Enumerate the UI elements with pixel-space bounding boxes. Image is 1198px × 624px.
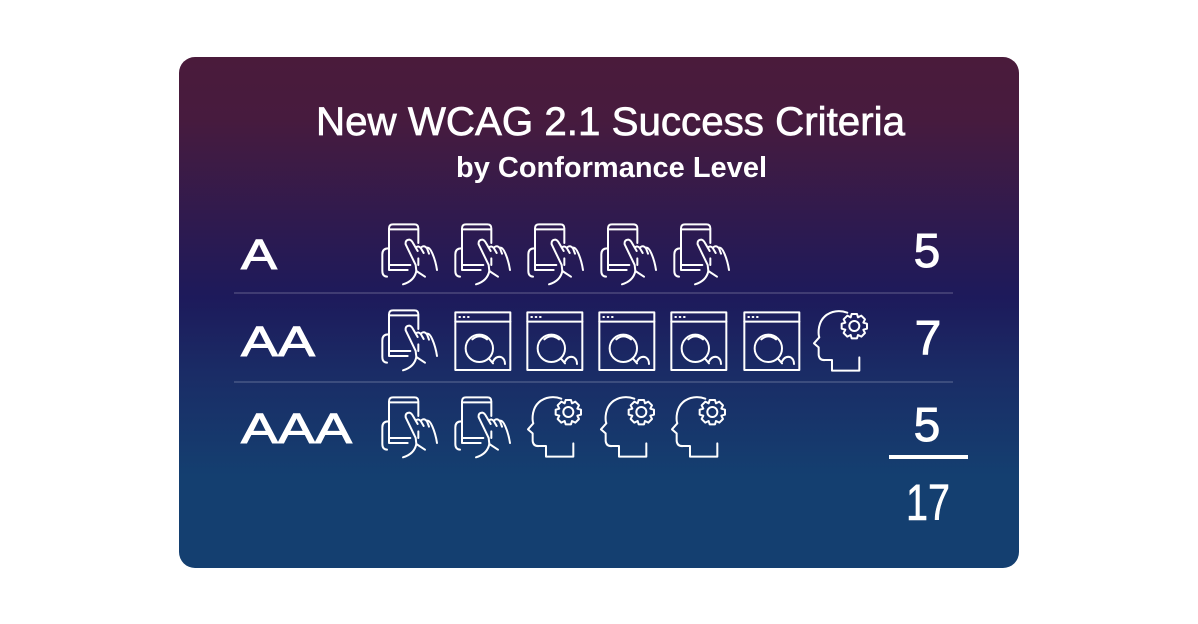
count: AAA: 5 bbox=[914, 399, 940, 452]
icons: A row bbox=[382, 224, 729, 284]
icons: AAA row bbox=[382, 397, 725, 457]
panel: card background bbox=[179, 57, 1019, 568]
count: AA: 7 bbox=[915, 312, 941, 365]
label: AA: AA bbox=[241, 318, 315, 366]
row: level AAA bbox=[241, 397, 725, 457]
title: New WCAG 2.1 Success Criteria bbox=[316, 100, 906, 144]
label: AAA: AAA bbox=[241, 405, 352, 453]
sum rule bbox=[889, 455, 968, 459]
label: A: A bbox=[241, 231, 277, 279]
count: A: 5 bbox=[914, 225, 940, 278]
row: level A bbox=[241, 224, 729, 284]
subtitle: by Conformance Level bbox=[456, 152, 767, 184]
icons: AA row bbox=[382, 310, 867, 371]
row: level AA bbox=[241, 310, 867, 371]
total: 17 bbox=[906, 474, 950, 531]
